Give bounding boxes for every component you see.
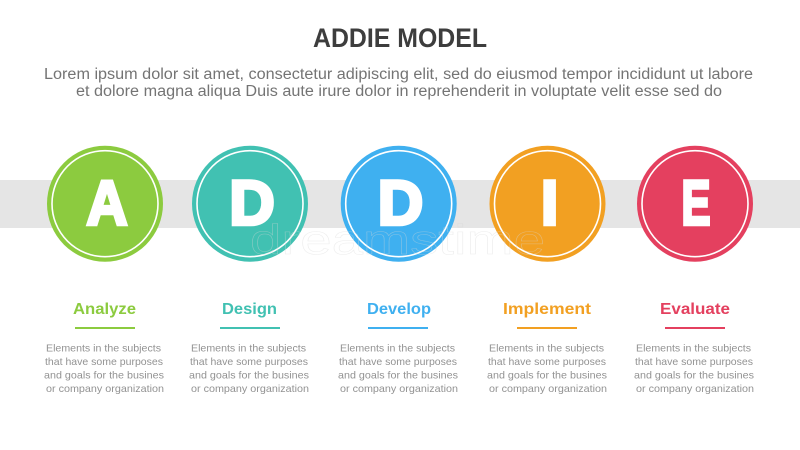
column: Develop: Elements in the subjects bbox=[340, 342, 455, 354]
column: Analyze: that have some purposes bbox=[45, 356, 163, 368]
column: Evaluate: that have some purposes bbox=[635, 356, 753, 368]
column: Evaluate: and goals for the busines bbox=[634, 370, 754, 382]
column: Evaluate: Evaluate bbox=[660, 301, 730, 318]
circle: E bbox=[637, 146, 753, 262]
circle: I: I bbox=[541, 168, 558, 238]
circle: D (Design) bbox=[192, 146, 308, 262]
column: Analyze: Analyze bbox=[73, 301, 136, 318]
column: Design: or company organization bbox=[191, 383, 309, 395]
circle: E: E bbox=[682, 168, 710, 238]
circle: A: A bbox=[86, 168, 128, 238]
circle: A bbox=[47, 146, 163, 262]
column: Analyze: or company organization bbox=[46, 383, 164, 395]
intro text block: Lorem ipsum dolor sit amet, consectetur adipiscing elit, sed do eiusmod tempor incididunt ut labore bbox=[44, 66, 753, 83]
column: Develop bbox=[338, 301, 458, 395]
column: Implement: or company organization bbox=[489, 383, 607, 395]
intro text block: et dolore magna aliqua Duis aute irure dolor in reprehenderit in voluptate velit esse sed do bbox=[76, 83, 722, 100]
column: Develop: or company organization bbox=[340, 383, 458, 395]
circle: I bbox=[490, 146, 606, 262]
column: Implement bbox=[487, 301, 607, 395]
column: Evaluate: Elements in the subjects bbox=[636, 342, 751, 354]
column: Design: Elements in the subjects bbox=[191, 342, 306, 354]
column: Design: and goals for the busines bbox=[189, 370, 309, 382]
circle: D (Develop): D bbox=[378, 168, 423, 238]
horizontal grey band bbox=[0, 180, 800, 228]
column: Develop: that have some purposes bbox=[339, 356, 457, 368]
column: Evaluate: or company organization bbox=[636, 383, 754, 395]
column: Analyze: and goals for the busines bbox=[44, 370, 164, 382]
column: Implement: that have some purposes bbox=[488, 356, 606, 368]
circle: D (Develop) bbox=[341, 146, 457, 262]
column: Design bbox=[189, 301, 309, 395]
column: Design: that have some purposes bbox=[190, 356, 308, 368]
column: Analyze bbox=[44, 301, 164, 395]
column: Implement: Elements in the subjects bbox=[489, 342, 604, 354]
intro text block bbox=[44, 66, 753, 100]
watermark: dreamstime bbox=[250, 216, 545, 263]
column: Evaluate bbox=[634, 301, 754, 395]
column: Design: Design bbox=[222, 301, 277, 318]
column: Develop: Develop bbox=[367, 301, 431, 318]
column: Implement: Implement bbox=[503, 301, 592, 318]
column: Analyze: Elements in the subjects bbox=[46, 342, 161, 354]
circle: D (Design): D bbox=[229, 168, 275, 238]
column: Develop: and goals for the busines bbox=[338, 370, 458, 382]
column: Implement: and goals for the busines bbox=[487, 370, 607, 382]
title: ADDIE MODEL bbox=[313, 23, 487, 53]
